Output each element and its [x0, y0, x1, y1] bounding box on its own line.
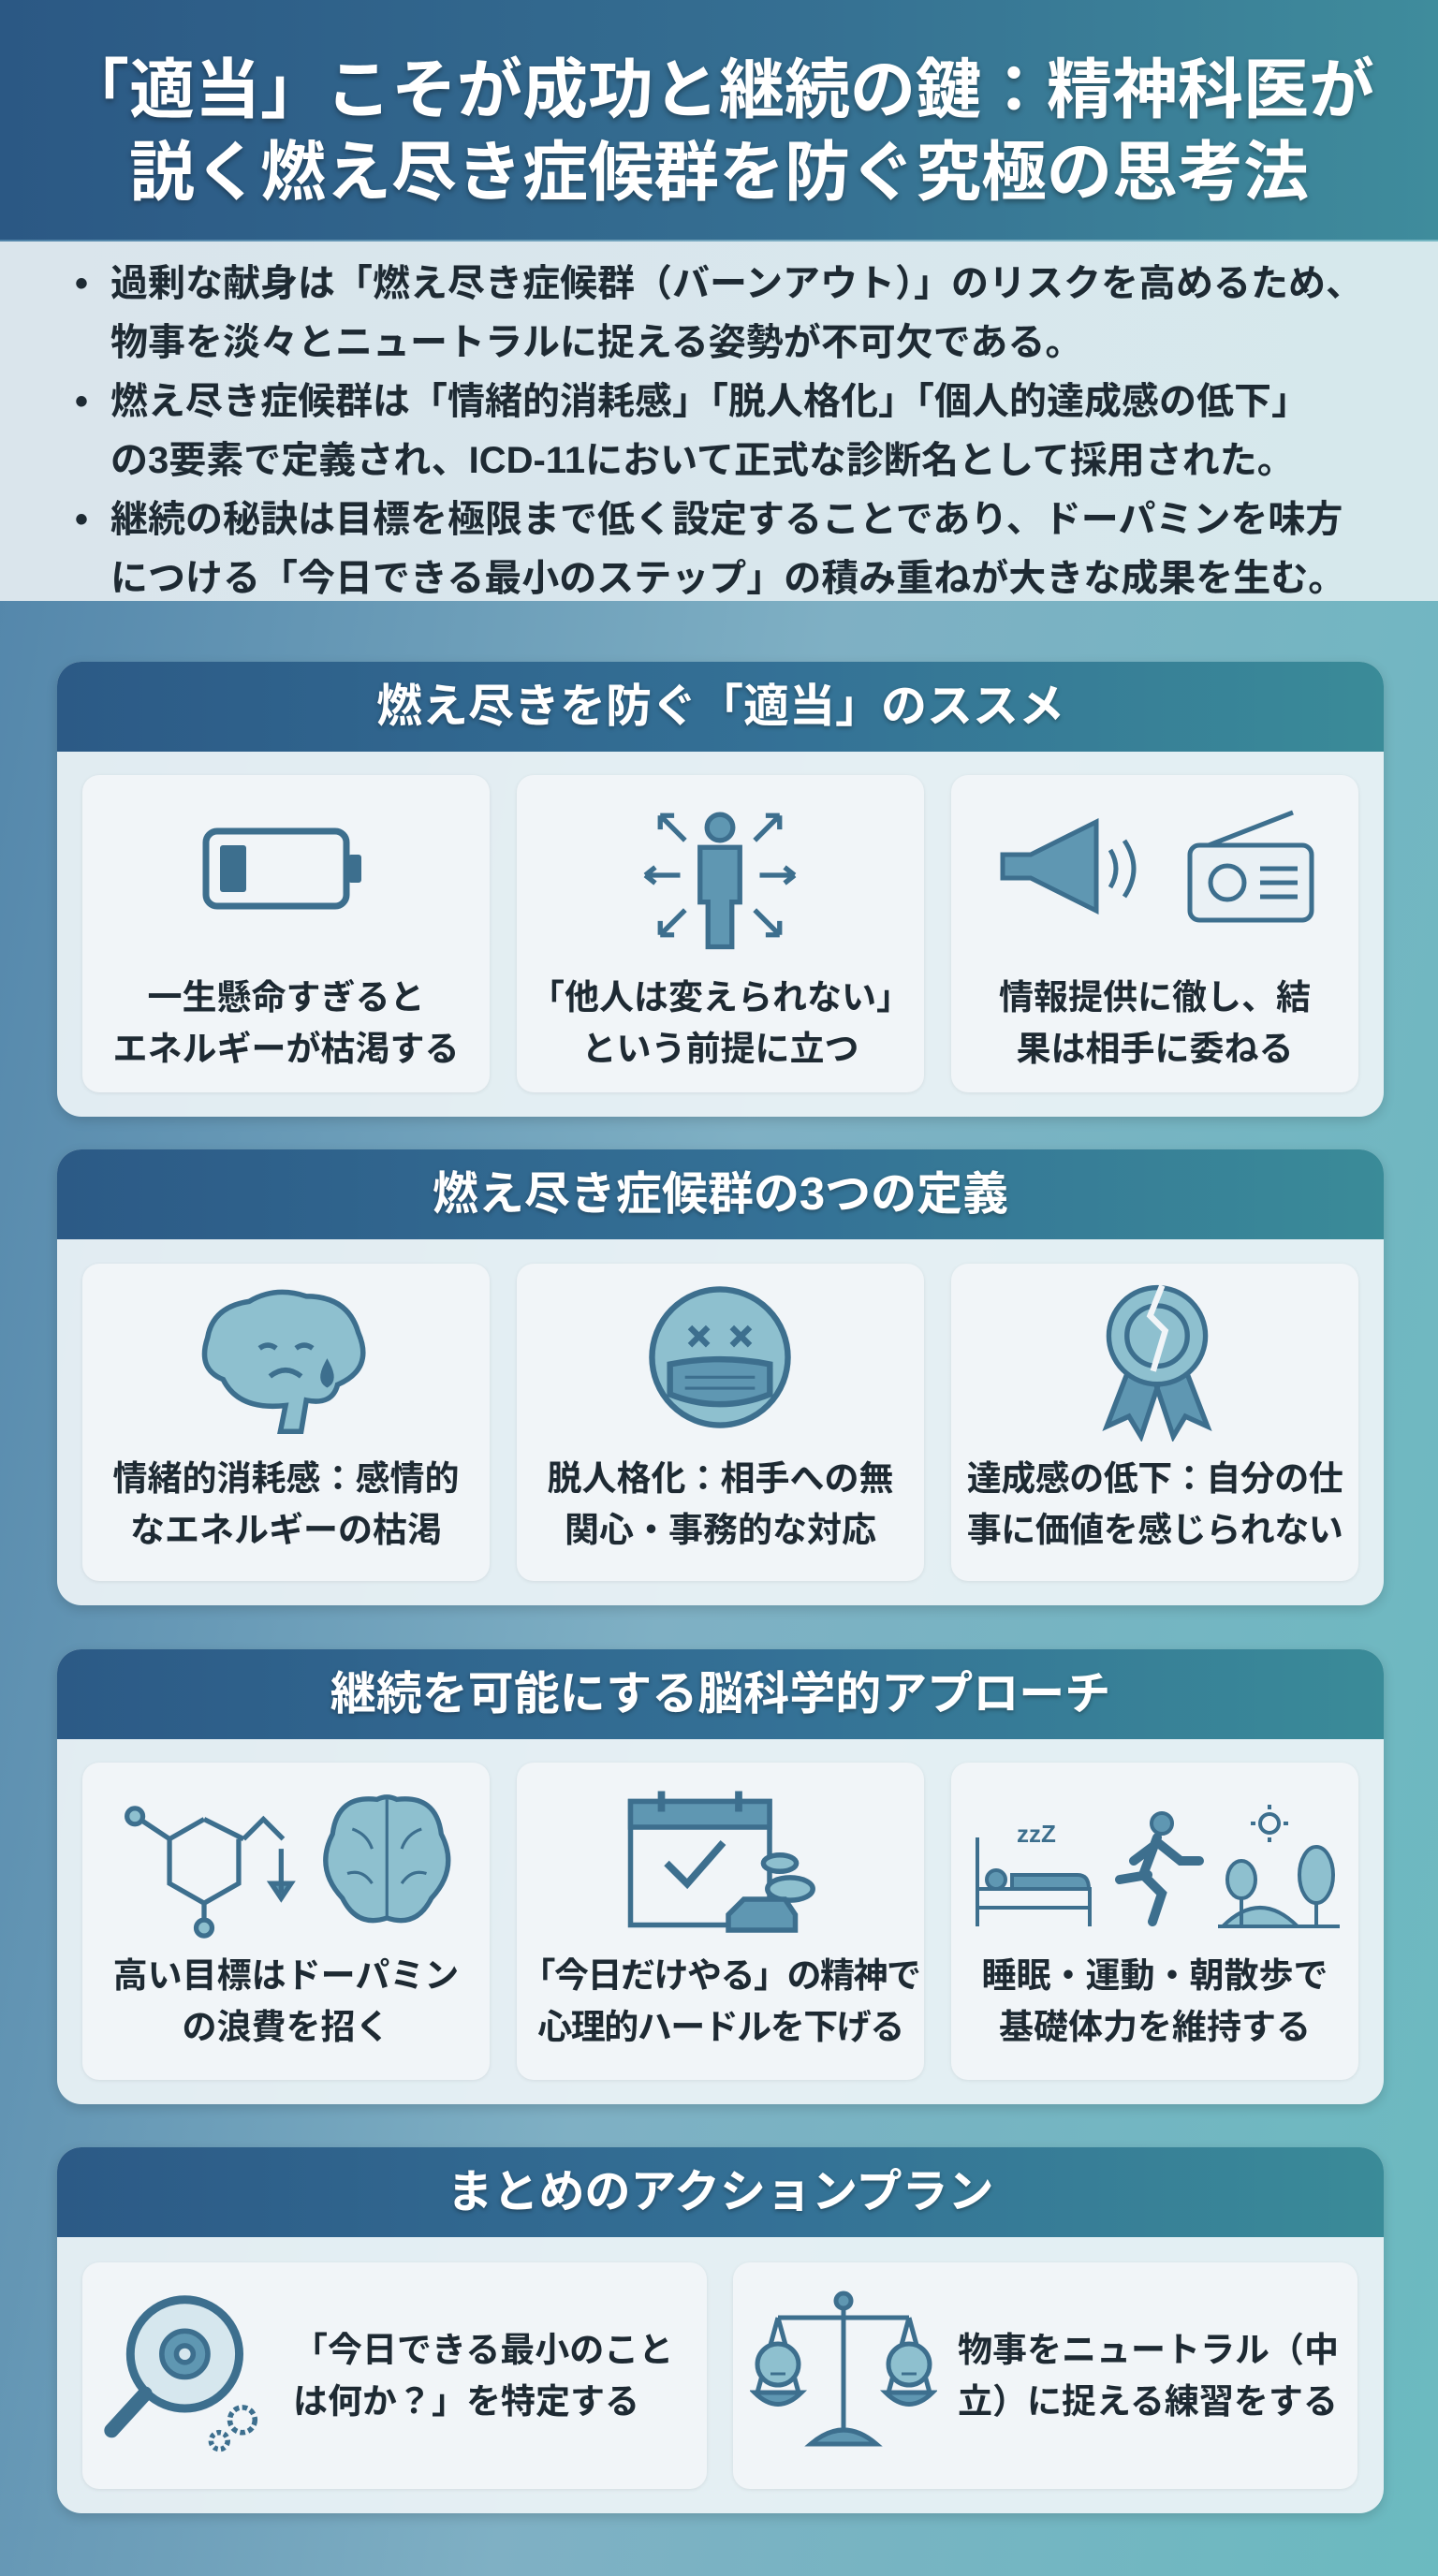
- card: depersonalization: [517, 1264, 924, 1581]
- card text: は何か？」を特定する: [293, 2382, 639, 2421]
- card text: [547, 1459, 893, 1549]
- card text: エネルギーが枯渇する: [112, 1030, 459, 1068]
- icon: molecule and brain: [125, 1794, 451, 1939]
- card: calendar: [517, 1763, 924, 2080]
- card text: 基礎体力を維持する: [999, 2008, 1311, 2046]
- card text: [981, 1956, 1328, 2046]
- summary bullets: 物事を淡々とニュートラルに捉える姿勢が不可欠である。: [110, 322, 1082, 363]
- panel: 適当のススメ: [57, 662, 1384, 1117]
- card text: 「今日できる最小のこと: [293, 2331, 673, 2369]
- card text: [530, 978, 911, 1068]
- card: neutral: [733, 2262, 1357, 2489]
- card text: 「今日だけやる」の精神で: [521, 1956, 919, 1995]
- icon: magnifier with gears: [104, 2295, 258, 2452]
- icon: megaphone and radio: [1000, 811, 1314, 923]
- panel: 3つの定義: [57, 1149, 1384, 1605]
- card text: [112, 1459, 459, 1549]
- card: person: [517, 775, 924, 1092]
- panel heading: [57, 1649, 1384, 1739]
- card text: 脱人格化：相手への無: [547, 1459, 893, 1498]
- card text: [999, 978, 1311, 1068]
- card text: 物事をニュートラル（中: [958, 2331, 1339, 2369]
- card: emotional exhaustion: [82, 1264, 490, 1581]
- card text: 関心・事務的な対応: [565, 1511, 876, 1549]
- card text: 情緒的消耗感：感情的: [112, 1459, 459, 1498]
- summary bullets: 過剰な献身は「燃え尽き症候群（バーンアウト）」のリスクを高めるため、: [110, 263, 1363, 304]
- icon: sleep, run, nature: zzZ: [1017, 1820, 1056, 1848]
- icon: sad brain: [202, 1290, 366, 1434]
- card text: 果は相手に委ねる: [1017, 1030, 1294, 1068]
- icon: low battery: [202, 827, 361, 910]
- card text: 立）に捉える練習をする: [958, 2382, 1338, 2421]
- icon: sleep, run, nature: [976, 1805, 1340, 1928]
- card text: 心理的ハードルを下げる: [537, 2008, 903, 2046]
- title: 説く燃え尽き症候群を防ぐ究極の思考法: [129, 136, 1309, 209]
- panel heading: まとめのアクションプラン: [447, 2167, 994, 2217]
- card text: 一生懸命すぎると: [148, 978, 425, 1017]
- icon: broken ribbon: [1102, 1284, 1212, 1442]
- icon: calendar with check: [627, 1792, 815, 1933]
- summary bullets: 継続の秘訣は目標を極限まで低く設定することであり、ドーパミンを味方: [110, 499, 1343, 540]
- summary bullets: の3要素で定義され、ICD-11において正式な診断名として採用された。: [110, 440, 1295, 481]
- summary bullets: 燃え尽き症候群は「情緒的消耗感」「脱人格化」「個人的達成感の低下」: [110, 381, 1309, 422]
- card text: [113, 1956, 459, 2046]
- title: 「適当」こそが成功と継続の鍵：精神科医が: [64, 53, 1374, 126]
- card text: 事に価値を感じられない: [967, 1511, 1343, 1549]
- card: battery: [82, 775, 490, 1092]
- card text: 「他人は変えられない」: [530, 978, 911, 1017]
- panel: アクションプラン: [57, 2147, 1384, 2513]
- panel heading: [57, 2147, 1384, 2237]
- panel heading: 継続を可能にする脳科学的アプローチ: [330, 1669, 1110, 1720]
- panel heading: [57, 662, 1384, 752]
- card text: という前提に立つ: [582, 1030, 859, 1068]
- card: megaphone radio: [951, 775, 1358, 1092]
- card text: 睡眠・運動・朝散歩で: [981, 1956, 1328, 1995]
- card text: [112, 978, 459, 1068]
- icon: person with arrows: [644, 812, 796, 949]
- card text: [958, 2331, 1339, 2421]
- card text: の浪費を招く: [182, 2008, 389, 2046]
- summary bullets: につける「今日できる最小のステップ」の積み重ねが大きな成果を生む。: [110, 558, 1345, 599]
- card text: 達成感の低下：自分の仕: [967, 1459, 1343, 1498]
- summary bullets: [0, 242, 1438, 601]
- card text: 高い目標はドーパミン: [113, 1956, 459, 1995]
- card text: [521, 1956, 919, 2046]
- card text: [293, 2331, 673, 2421]
- panel: 脳科学的アプローチ: [57, 1649, 1384, 2104]
- icon: masked face: [649, 1286, 791, 1428]
- panel heading: [57, 1149, 1384, 1239]
- icon: balance scale: [750, 2291, 937, 2447]
- card text: なエネルギーの枯渇: [130, 1511, 442, 1549]
- card: smallest step: [82, 2262, 707, 2489]
- title: [0, 0, 1438, 240]
- card: sleep run walk: [951, 1763, 1358, 2080]
- panel heading: 燃え尽き症候群の3つの定義: [433, 1169, 1008, 1220]
- panel heading: 燃え尽きを防ぐ「適当」のススメ: [376, 681, 1064, 732]
- card text: 情報提供に徹し、結: [999, 978, 1311, 1017]
- card: reduced accomplishment: [951, 1264, 1358, 1581]
- card: dopamine: [82, 1763, 490, 2080]
- card text: [967, 1459, 1343, 1549]
